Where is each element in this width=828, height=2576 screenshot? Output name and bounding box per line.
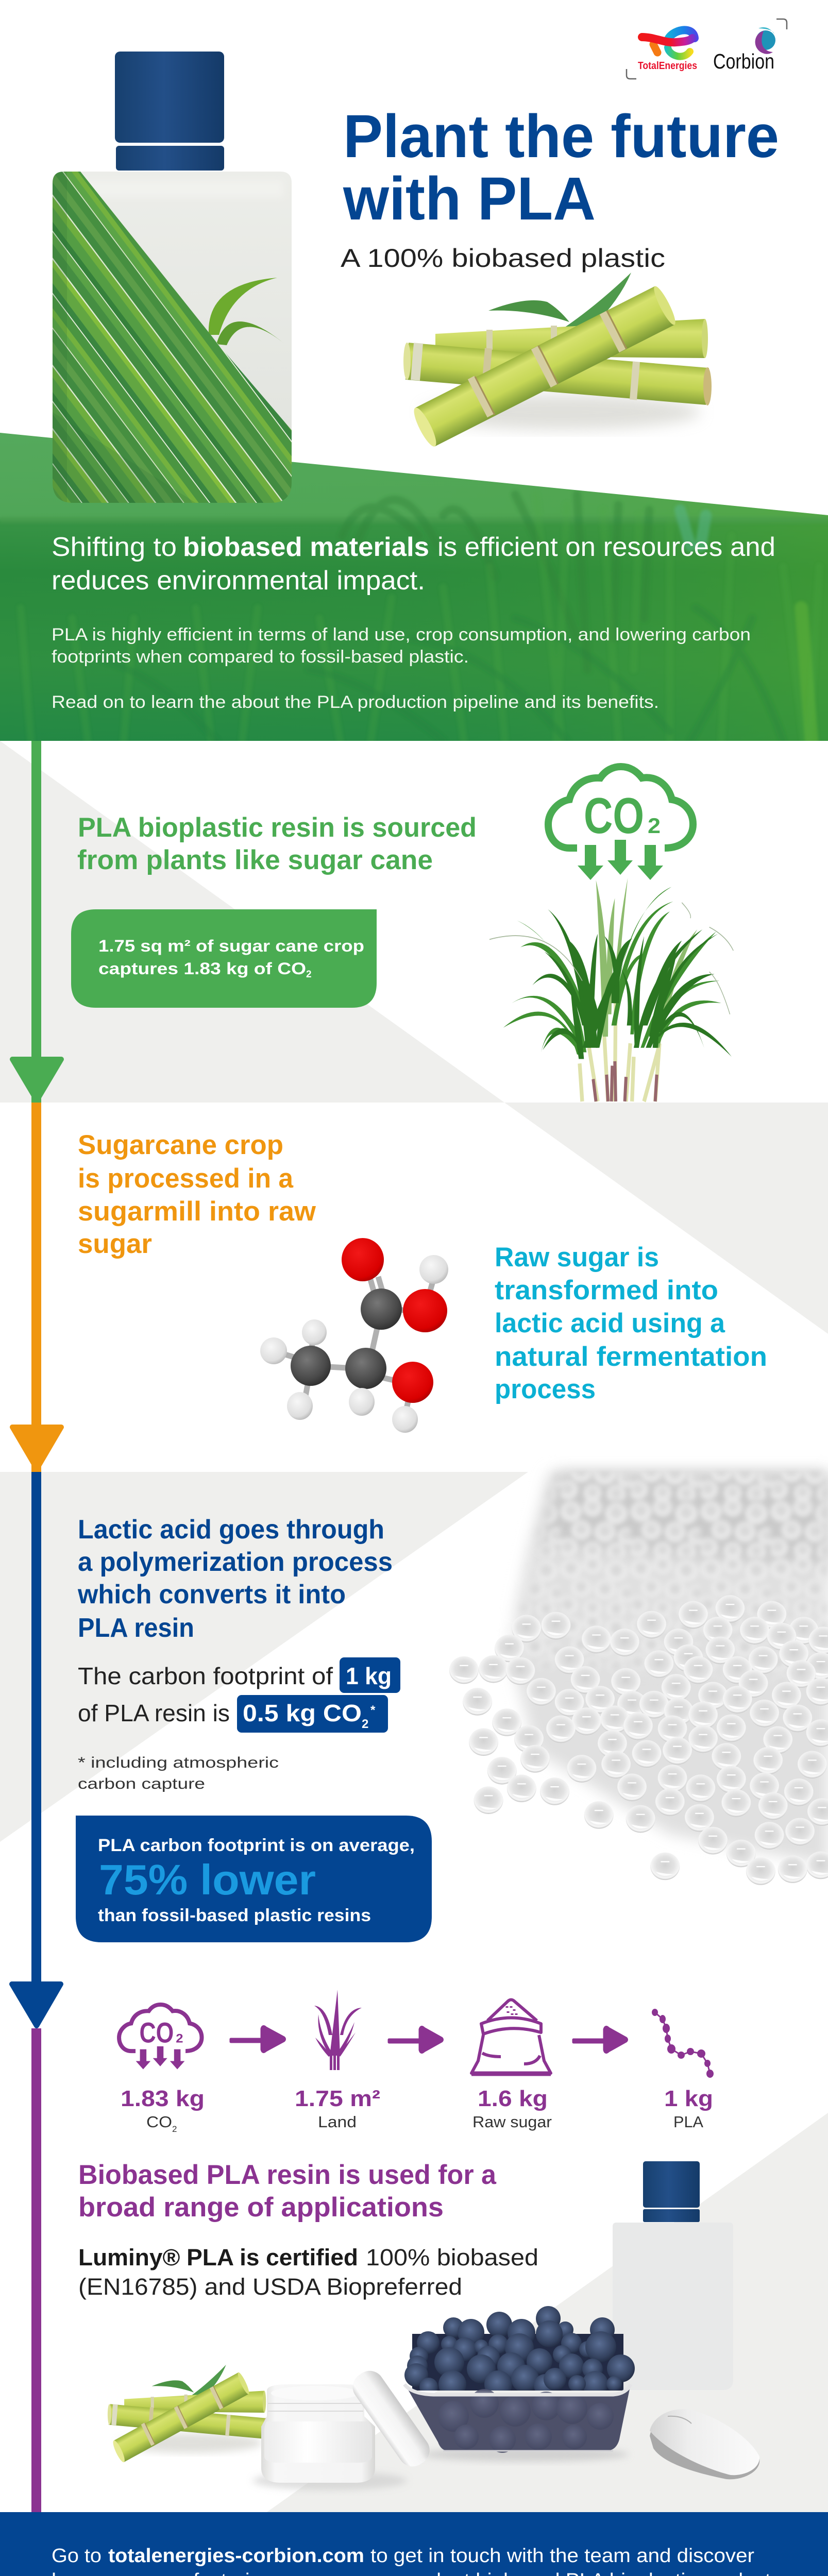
heading: polymerization: Lactic acid goes through: [78, 1515, 384, 1545]
intro text: Read on to learn the about the PLA production pipeline and its benefits.: [52, 692, 659, 712]
carbon footprint statement: 0.5 kg CO: [243, 1700, 362, 1726]
callout: 75% lower: PLA carbon footprint is on average,: [98, 1836, 415, 1855]
icon: PLA polymer chain: [652, 2009, 714, 2078]
intro text: footprints when compared to fossil-based plastic.: [52, 647, 469, 667]
icon: plant land: [314, 1990, 362, 2070]
icon: raw sugar bag: [471, 2000, 551, 2074]
heading: raw sugar: natural fermentation: [495, 1342, 767, 1372]
blueberry tray: [404, 2306, 635, 2462]
callout: CO2 captured: 1.75 sq m² of sugar cane crop: [98, 937, 364, 955]
heading: sugarcane crop: is processed in a: [78, 1163, 293, 1194]
sugarcane stalks: [403, 273, 712, 449]
icon: CO2 cloud: 2: [648, 814, 661, 838]
icon: CO2 cloud purple: CO: [139, 2016, 174, 2049]
title: with PLA: [343, 165, 596, 233]
arrow: [573, 2027, 627, 2053]
label: PLA: [664, 2086, 713, 2131]
green field background: [0, 433, 828, 741]
label: land: Land: [318, 2113, 357, 2131]
call to action band: to get in touch with the team and discover: [370, 2545, 754, 2567]
label: PLA: PLA: [673, 2113, 703, 2131]
intro text: is efficient on resources and: [437, 532, 775, 562]
callout: CO2 captured: 2: [306, 969, 312, 980]
heading: polymerization: PLA resin: [78, 1613, 194, 1643]
heading: polymerization: a polymerization process: [78, 1547, 393, 1577]
label: raw sugar: 1.6 kg: [478, 2086, 548, 2111]
callout: 75% lower: [76, 1816, 432, 1942]
heading: PLA bioplastic resin is sourced: [78, 812, 477, 843]
certification text: (EN16785) and USDA Biopreferred: [78, 2274, 462, 2300]
heading: applications: [78, 2160, 497, 2223]
bottle with sugarcane leaf: [53, 52, 292, 503]
panel: polymerization: [0, 1472, 828, 1942]
arrow: [389, 2027, 442, 2053]
title: Plant the future: [343, 103, 779, 171]
sugarcane stalks small: [108, 2365, 268, 2464]
panel: applications: [78, 1990, 828, 2512]
footnote: [78, 1754, 279, 1792]
call to action band: totalenergies-corbion.com: [108, 2545, 364, 2567]
heading: raw sugar: [495, 1242, 767, 1404]
label: CO2 amount: 1.83 kg: [121, 2086, 205, 2111]
certification text: 100% biobased: [366, 2244, 538, 2270]
label: land: [295, 2086, 380, 2131]
title: [343, 103, 779, 233]
callout: CO2 captured: captures 1.83 kg of CO: [98, 959, 306, 978]
intro text: biobased materials: [183, 532, 429, 562]
sugarcane plant: [489, 878, 733, 1101]
callout: CO2 captured: [71, 909, 377, 1008]
arrow head: orange: [12, 1427, 61, 1469]
certification text: [78, 2244, 538, 2300]
PLA pellets: [449, 1472, 828, 1885]
footnote: * including atmospheric: [78, 1754, 279, 1771]
icon: CO2 cloud purple: [119, 2005, 201, 2069]
hero panel: [0, 19, 828, 741]
label: CO2 amount: 2: [172, 2124, 177, 2134]
heading: from plants like sugar cane: [77, 845, 433, 875]
intro text: [52, 532, 775, 712]
subtitle: A 100% biobased plastic: [341, 244, 665, 273]
arrow head: green: [12, 1059, 61, 1100]
cream jar and lid: [252, 2365, 435, 2490]
callout: 75% lower: than fossil-based plastic resins: [98, 1906, 371, 1925]
logos: TotalEnergies and Corbion: TotalEnergies: [638, 60, 697, 72]
carbon footprint statement: of PLA resin is: [78, 1700, 230, 1726]
heading: raw sugar: lactic acid using a: [495, 1308, 725, 1338]
heading: raw sugar: Raw sugar is: [495, 1242, 659, 1273]
icon: CO2 cloud: [548, 767, 693, 880]
label: CO2 amount: CO: [146, 2113, 172, 2131]
heading: sugarcane crop: sugar: [78, 1229, 152, 1259]
heading: applications: Biobased PLA resin is used for a: [78, 2160, 497, 2190]
certification text: Luminy® PLA is certified: [78, 2244, 358, 2270]
label: CO2 amount: [121, 2086, 205, 2134]
arrow: [231, 2026, 284, 2052]
carbon footprint statement: 1 kg: [346, 1663, 392, 1689]
panel: sugar cane source: [0, 741, 733, 1103]
carbon footprint statement: *: [370, 1703, 376, 1717]
icon: CO2 cloud purple: 2: [176, 2032, 183, 2046]
heading: sugarcane crop: [78, 1130, 316, 1259]
intro text: Shifting to: [52, 532, 177, 562]
heading: sugarcane crop: sugarmill into raw: [78, 1196, 316, 1227]
heading: raw sugar: process: [495, 1374, 596, 1404]
call to action band: Go to: [52, 2545, 102, 2567]
bottle: [613, 2161, 733, 2390]
label: raw sugar: [472, 2086, 552, 2131]
heading: polymerization: [77, 1515, 393, 1643]
carbon footprint statement: [78, 1657, 400, 1733]
heading: raw sugar: transformed into: [495, 1275, 718, 1306]
icon: CO2 cloud: CO: [584, 787, 644, 844]
call to action band: [0, 2512, 828, 2576]
process line with arrowheads: [12, 741, 61, 2512]
intro text: PLA is highly efficient in terms of land use, crop consumption, and lowering carbon: [52, 625, 751, 645]
heading: polymerization: which converts it into: [77, 1580, 346, 1609]
carbon footprint statement: The carbon footprint of: [78, 1663, 333, 1689]
computer mouse: [650, 2409, 759, 2479]
carbon footprint statement: 2: [362, 1717, 368, 1731]
heading: applications: broad range of applications: [78, 2192, 444, 2223]
label: land: 1.75 m²: [295, 2086, 380, 2111]
intro text: reduces environmental impact.: [52, 566, 425, 596]
molecule: lactic acid: [260, 1238, 448, 1433]
label: PLA: 1 kg: [664, 2086, 713, 2111]
heading: sugarcane crop: Sugarcane crop: [78, 1130, 283, 1160]
callout: 75% lower: 75% lower: [99, 1856, 316, 1904]
logos: TotalEnergies and Corbion: Corbion: [713, 49, 774, 73]
footnote: carbon capture: [78, 1775, 205, 1792]
conversion flow chart: [119, 1990, 714, 2134]
logos: TotalEnergies and Corbion: [627, 19, 787, 79]
label: raw sugar: Raw sugar: [472, 2113, 552, 2131]
panel: sugar mill and fermentation: [78, 1103, 828, 1433]
heading: [77, 812, 477, 875]
arrow head: blue: [12, 1984, 61, 2026]
